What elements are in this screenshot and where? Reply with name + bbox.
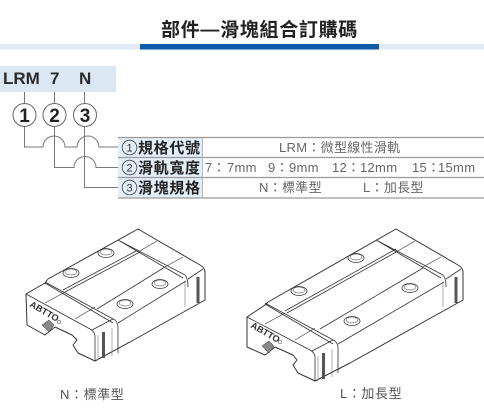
number circles: 2: [49, 106, 60, 127]
long slider block: [247, 229, 463, 381]
row 2: 7mm: [227, 160, 257, 175]
specification table: [118, 138, 484, 198]
row 2: 15mm: [438, 160, 475, 175]
row 2: 9mm: [289, 160, 319, 175]
row 2: 12mm: [360, 160, 397, 175]
number circles: [13, 104, 96, 127]
title band: [0, 44, 484, 50]
standard block logo: ABTTO: [28, 299, 61, 324]
caption: standard type: N：標準型: [60, 387, 124, 402]
standard slider block: [26, 229, 205, 361]
row 1: 規格代號: [138, 139, 200, 157]
part code box: 7: [50, 69, 59, 88]
part code box: N: [79, 69, 91, 88]
caption: long type: L：加長型: [340, 386, 402, 401]
row 1: LRM：微型線性滑軌: [279, 140, 400, 155]
number circles: 3: [80, 106, 90, 127]
row 1: 1: [126, 142, 133, 154]
row 2: 15：: [412, 160, 440, 175]
row 2: 9：: [268, 160, 289, 175]
row 3: L：加長型: [363, 180, 424, 195]
connector lines: [24, 92, 118, 188]
row 2: 7：: [205, 160, 226, 175]
row 2: [122, 159, 475, 177]
row 3: 滑塊規格: [138, 179, 200, 197]
number circles: 1: [19, 106, 30, 127]
row 2: 2: [126, 162, 133, 174]
row 2: 滑軌寬度: [138, 159, 200, 177]
part code box: [0, 66, 116, 92]
title: 部件—滑塊組合訂購碼: [161, 18, 358, 41]
part code box: LRM: [3, 69, 40, 88]
row 3: [122, 179, 424, 197]
row 1: [122, 139, 400, 157]
row 3: N：標準型: [259, 180, 322, 195]
row 2: 12：: [332, 160, 360, 175]
row 3: 3: [126, 182, 133, 194]
long block logo: ABTTO: [249, 320, 282, 345]
